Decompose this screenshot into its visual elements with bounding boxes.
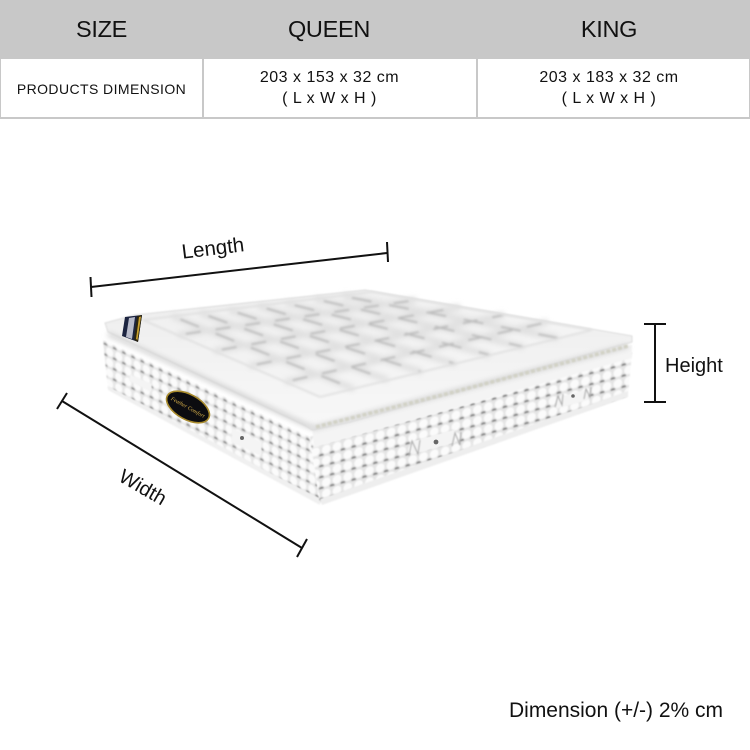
header: queen: QUEEN xyxy=(288,16,370,42)
brand oval badge: Feather Comfort xyxy=(169,395,206,420)
quilted surface xyxy=(143,292,592,397)
tolerance note: Dimension (+/-) 2% cm xyxy=(509,699,723,722)
pillow top xyxy=(105,290,632,430)
height dimension arrow xyxy=(644,324,666,402)
mattress base: right tufted side xyxy=(310,345,632,505)
queen dimensions xyxy=(202,59,476,117)
queen dimensions: ( L x W x H ) xyxy=(282,90,377,107)
side emblems xyxy=(129,374,591,456)
length label: Length xyxy=(180,233,245,264)
width dimension arrow xyxy=(57,393,307,557)
king dimensions: ( L x W x H ) xyxy=(562,90,656,107)
queen dimensions: 203 x 153 x 32 cm xyxy=(260,69,399,86)
table dimensions row xyxy=(0,59,750,119)
size table xyxy=(0,0,750,119)
height label: Height xyxy=(665,355,723,377)
mattress xyxy=(103,290,632,505)
header: size: SIZE xyxy=(76,16,127,42)
king dimensions: 203 x 183 x 32 cm xyxy=(539,69,679,86)
king dimensions xyxy=(476,59,750,117)
header: king: KING xyxy=(581,16,637,42)
tag label on corner xyxy=(122,315,142,342)
mattress base: left tufted side xyxy=(103,340,320,505)
table header row xyxy=(0,0,750,59)
soft band shading xyxy=(108,334,628,428)
width label: Width xyxy=(115,466,170,510)
piping seam xyxy=(316,346,628,427)
row label: products dimension: PRODUCTS DIMENSION xyxy=(17,81,186,97)
brand oval badge xyxy=(161,385,215,429)
length dimension arrow xyxy=(90,242,388,297)
